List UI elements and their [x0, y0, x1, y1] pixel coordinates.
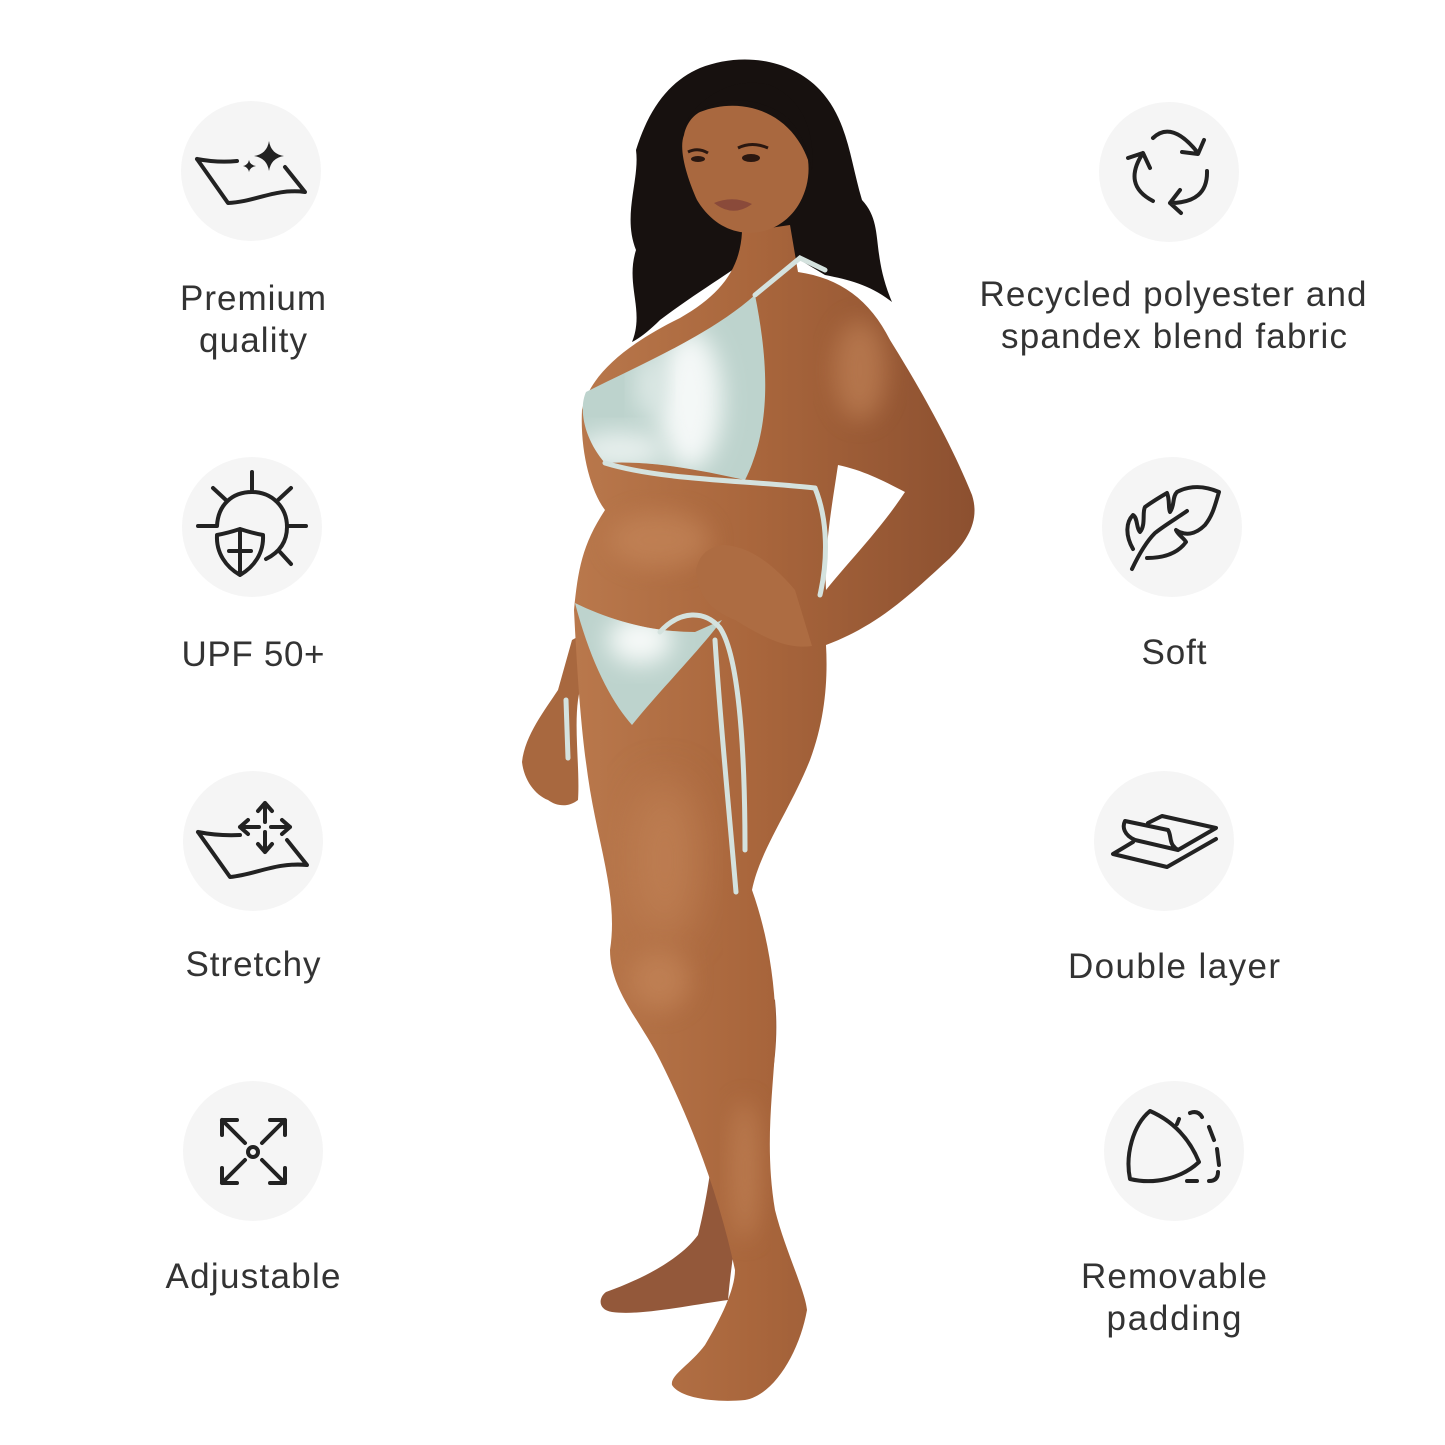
- icon: fabric with arrows: [183, 771, 323, 911]
- bent arm gap: [826, 465, 905, 590]
- skin highlights: [610, 320, 886, 1240]
- back leg: [601, 900, 776, 1313]
- feature: UPF 50+: [182, 457, 324, 674]
- hair front: [682, 83, 813, 170]
- facial features: [688, 144, 768, 211]
- head: [682, 106, 809, 233]
- label: quality: [199, 321, 308, 360]
- feature: adjustable: [166, 1081, 340, 1296]
- label: spandex blend fabric: [1001, 317, 1347, 356]
- feature: stretchy: [183, 771, 323, 984]
- hand on hip: [696, 545, 812, 647]
- swim top: [582, 296, 766, 480]
- icon: layered sheets: [1094, 771, 1234, 911]
- label: Premium: [180, 279, 326, 318]
- torso and front leg: [574, 225, 975, 1401]
- swim bottom: [575, 603, 722, 725]
- label: Soft: [1142, 633, 1207, 672]
- feature: recycled fabric: [980, 102, 1366, 356]
- label: padding: [1106, 1299, 1242, 1338]
- label: Removable: [1081, 1257, 1267, 1296]
- back arm: [522, 630, 590, 805]
- label: Recycled polyester and: [980, 275, 1366, 314]
- label: Stretchy: [186, 945, 321, 984]
- icon: fabric with sparkle: [181, 101, 321, 241]
- hair: [631, 59, 892, 342]
- label: Double layer: [1068, 947, 1280, 986]
- icon: recycle arrows: [1099, 102, 1239, 242]
- straps and ties: [566, 258, 825, 892]
- feature: removable padding: [1081, 1081, 1267, 1338]
- icon: four arrows: [183, 1081, 323, 1221]
- icon: sun and shield: [182, 457, 322, 597]
- feature: soft: [1102, 457, 1242, 672]
- feature: premium quality: [180, 101, 326, 360]
- icon: pad with dashed outline: [1104, 1081, 1244, 1221]
- feature: double layer: [1068, 771, 1280, 986]
- label: UPF 50+: [182, 635, 324, 674]
- icon: feather: [1102, 457, 1242, 597]
- label: Adjustable: [166, 1257, 340, 1296]
- model figure: [522, 59, 975, 1401]
